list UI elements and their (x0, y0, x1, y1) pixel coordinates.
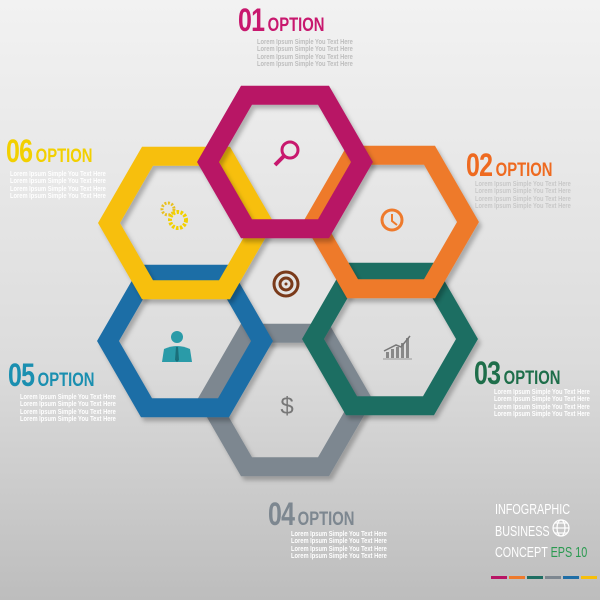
footer title: INFOGRAPHIC (495, 501, 570, 518)
text 05: Lorem Ipsum Simple You Text Here (20, 414, 116, 423)
hex 05 blue (108, 274, 262, 408)
text 04: Lorem Ipsum Simple You Text Here (291, 536, 387, 545)
text 04: Lorem Ipsum Simple You Text Here (291, 551, 387, 560)
hex 06 yellow (109, 156, 263, 290)
footer title: CONCEPT EPS 10 (495, 544, 587, 561)
heading 03: 03 OPTION (474, 355, 560, 391)
text 03: Lorem Ipsum Simple You Text Here (494, 394, 590, 403)
text 02: Lorem Ipsum Simple You Text Here (475, 179, 571, 188)
text 02: Lorem Ipsum Simple You Text Here (475, 194, 571, 203)
text 01: Lorem Ipsum Simple You Text Here (257, 59, 353, 68)
text 06: Lorem Ipsum Simple You Text Here (10, 191, 106, 200)
footer title (495, 501, 587, 561)
text 01: Lorem Ipsum Simple You Text Here (257, 44, 353, 53)
text 03: Lorem Ipsum Simple You Text Here (494, 387, 590, 396)
icon: magnifier (275, 142, 298, 165)
text 01: Lorem Ipsum Simple You Text Here (257, 52, 353, 61)
hex 03 teal (313, 272, 467, 406)
text 03: Lorem Ipsum Simple You Text Here (494, 409, 590, 418)
text 04 (291, 529, 387, 560)
icon: globe (553, 520, 569, 536)
text 02: Lorem Ipsum Simple You Text Here (475, 201, 571, 210)
text 06: Lorem Ipsum Simple You Text Here (10, 176, 106, 185)
hex 04 gray (208, 333, 362, 467)
text 04: Lorem Ipsum Simple You Text Here (291, 529, 387, 538)
hex 01 magenta (208, 95, 362, 229)
icon: target (274, 272, 298, 296)
footer title: BUSINESS (495, 522, 550, 540)
heading 04: 04 OPTION (268, 496, 354, 532)
text 06 (10, 169, 106, 200)
text 03: Lorem Ipsum Simple You Text Here (494, 402, 590, 411)
text 04: Lorem Ipsum Simple You Text Here (291, 544, 387, 553)
hex 02 orange (314, 155, 468, 289)
text 02: Lorem Ipsum Simple You Text Here (475, 186, 571, 195)
text 03 (494, 387, 590, 418)
text 06: Lorem Ipsum Simple You Text Here (10, 184, 106, 193)
center hexagon (230, 235, 340, 329)
heading 02: 02 OPTION (466, 147, 552, 183)
text 01 (257, 37, 353, 68)
heading 06: 06 OPTION (6, 133, 92, 169)
icon: dollar: $ (280, 393, 294, 420)
icon: gears (162, 203, 186, 228)
text 01: Lorem Ipsum Simple You Text Here (257, 37, 353, 46)
text 06: Lorem Ipsum Simple You Text Here (10, 169, 106, 178)
icon: pie clock (382, 210, 402, 230)
text 05 (20, 392, 116, 423)
text 05: Lorem Ipsum Simple You Text Here (20, 392, 116, 401)
text 05: Lorem Ipsum Simple You Text Here (20, 399, 116, 408)
heading 05: 05 OPTION (8, 357, 94, 393)
color bar legend (491, 576, 597, 579)
text 02 (475, 179, 571, 210)
icon: chart (383, 336, 412, 359)
icon: businessman (162, 331, 192, 362)
text 05: Lorem Ipsum Simple You Text Here (20, 407, 116, 416)
heading 01: 01 OPTION (238, 2, 324, 38)
